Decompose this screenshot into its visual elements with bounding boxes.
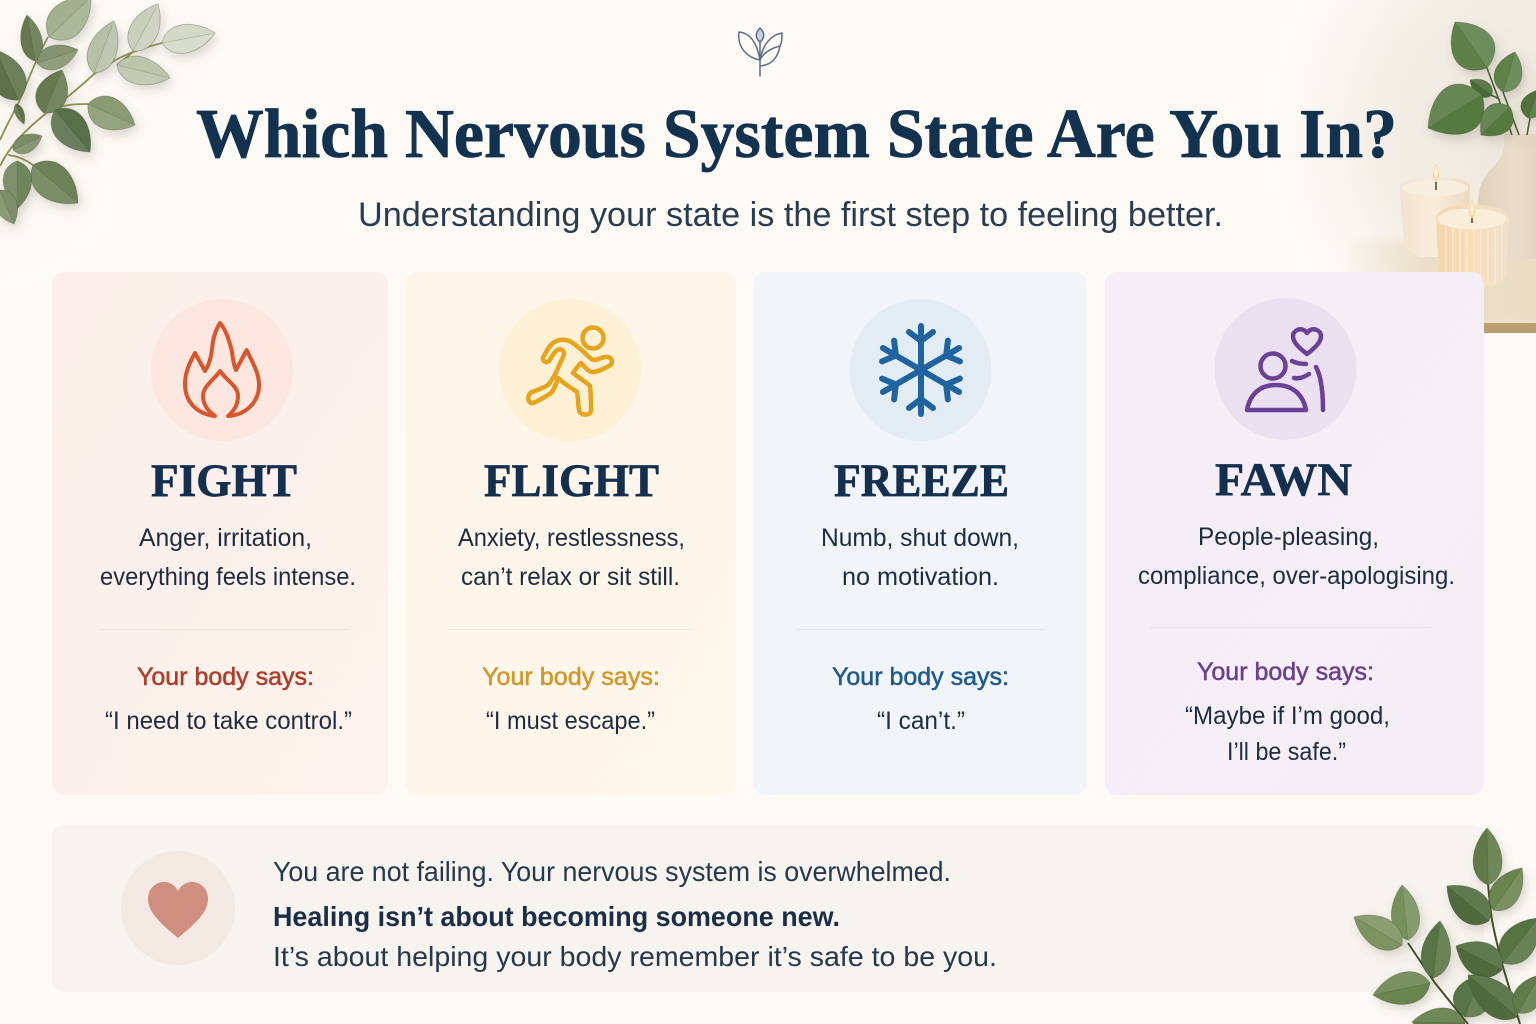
description: fight: Anger, irritation, [139,524,312,552]
icon: person and heart [1214,298,1356,440]
icon: flame [151,299,293,441]
quote: fawn: I’ll be safe.” [1227,738,1346,766]
description: fawn: compliance, over-apologising. [1138,562,1455,590]
description: fight: everything feels intense. [100,563,356,591]
description: fight [100,524,356,591]
subtitle: Understanding your state is the first step to feeling better. [358,196,1223,234]
quote: fawn [1185,702,1390,766]
quote: fight: “I need to take control.” [105,707,352,735]
description: freeze: Numb, shut down, [821,524,1019,552]
label: your body says, flight: Your body says: [482,663,660,691]
decoration: bottom-right leafy branches [1346,828,1536,1024]
icon: sprout emblem [739,28,782,76]
quote: flight: “I must escape.” [486,707,655,735]
heading: fight: FIGHT [151,455,297,507]
label: your body says, fight: Your body says: [137,663,314,691]
title: Which Nervous System State Are You In? [196,96,1397,173]
heading: freeze: FREEZE [834,455,1009,507]
icon: running figure [499,299,641,441]
description: fawn: People-pleasing, [1198,523,1379,551]
icon: front ribbed candle [1436,199,1509,286]
heading: fawn: FAWN [1215,454,1352,506]
decoration: candles and vase still life [1340,134,1536,333]
description: flight: can’t relax or sit still. [461,563,680,591]
decoration: top-left leafy branch [0,0,218,228]
description: fawn [1138,523,1455,590]
label: your body says, fawn: Your body says: [1197,658,1374,686]
description: flight [458,524,685,591]
icon: back candle [1400,164,1470,257]
panel: freeze [753,272,1087,795]
text: message line two: Healing isn’t about becoming someone new. [273,901,840,932]
quote: freeze: “I can’t.” [877,707,965,735]
text: message line one: You are not failing. Your nervous system is overwhelmed. [273,856,951,887]
panel: fawn [1105,272,1484,795]
description: freeze [821,524,1019,591]
description: freeze: no motivation. [842,563,999,591]
panel: reassurance message [52,825,1484,992]
text: message line three: It’s about helping your body remember it’s safe to be you. [273,941,997,972]
quote: fawn: “Maybe if I’m good, [1185,702,1390,730]
description: flight: Anxiety, restlessness, [458,524,685,552]
panel: flight [405,272,736,795]
heading: flight: FLIGHT [484,455,659,507]
icon: ceramic vase [1478,134,1536,259]
panel: fight [52,272,388,795]
icon: snowflake [850,299,992,441]
icon: heart [121,851,235,965]
label: your body says, freeze: Your body says: [832,663,1009,691]
decoration: top-right potted leaves [1415,10,1536,149]
